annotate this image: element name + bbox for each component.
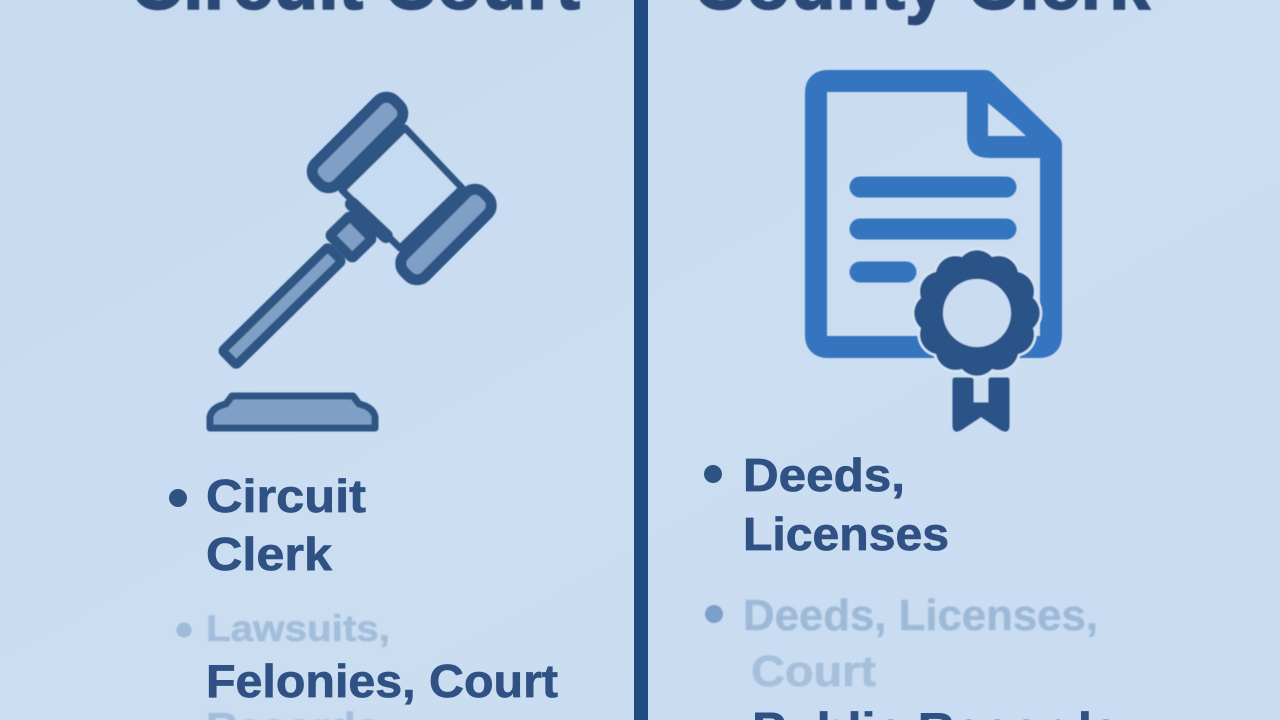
bullet: lawsuits, felonies, court records: Felonies, Court bbox=[206, 655, 558, 707]
bullet: lawsuits, felonies, court records: Lawsuits, bbox=[206, 608, 390, 649]
bullet: deeds, licenses, court public records bbox=[705, 591, 1120, 720]
bullet: deeds, licenses, court public records: Deeds, Licenses, bbox=[743, 591, 1098, 640]
bullet: circuit clerk: Clerk bbox=[206, 528, 332, 580]
bullet: circuit clerk: Circuit bbox=[206, 470, 366, 522]
bullet: deeds, licenses: Deeds, bbox=[743, 449, 905, 501]
bullet: circuit clerk bbox=[169, 470, 366, 580]
bullet: lawsuits, felonies, court records bbox=[176, 608, 558, 720]
icon: document with seal bbox=[816, 78, 1056, 429]
icon: gavel bbox=[210, 92, 496, 428]
bullet: deeds, licenses: Licenses bbox=[743, 508, 949, 560]
bullet: deeds, licenses, court public records: Court bbox=[751, 647, 876, 696]
bullet: deeds, licenses bbox=[704, 449, 949, 560]
panel: circuit court bbox=[130, 0, 580, 720]
panel: county clerk bbox=[693, 0, 1150, 720]
